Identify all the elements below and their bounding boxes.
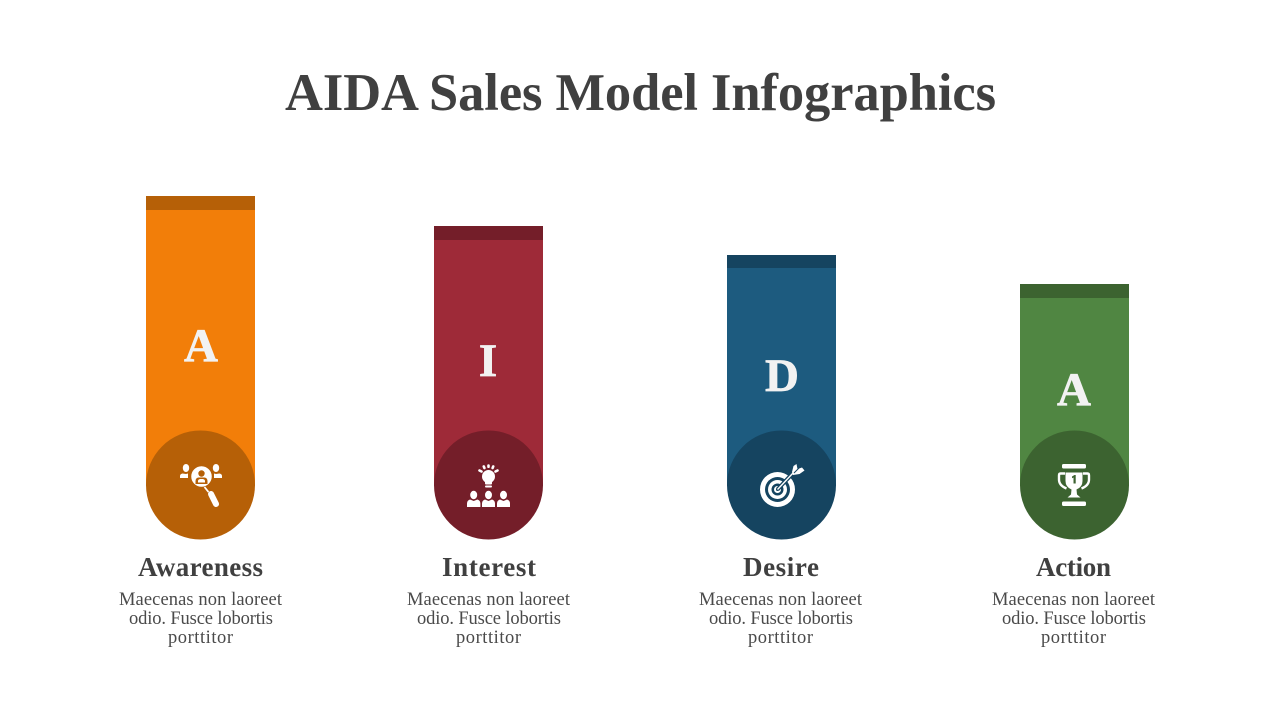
letter: I: [479, 335, 497, 387]
description: Maecenas non laoreet: [119, 590, 283, 610]
description: porttitor: [456, 628, 521, 648]
description: porttitor: [748, 628, 813, 648]
heading: Awareness: [138, 552, 263, 582]
description: odio. Fusce lobortis: [129, 609, 273, 629]
icon: people magnifier: [180, 464, 222, 504]
letter: A: [184, 320, 218, 372]
icon circle: [146, 430, 255, 540]
description: odio. Fusce lobortis: [1002, 609, 1146, 629]
description: porttitor: [1041, 628, 1106, 648]
icon: trophy: [1059, 464, 1089, 506]
icon circle: [1020, 430, 1129, 540]
heading: Desire: [743, 552, 819, 582]
heading: Interest: [442, 552, 536, 582]
panel: Awareness: [119, 196, 283, 648]
description: Maecenas non laoreet: [407, 590, 571, 610]
title: AIDA Sales Model Infographics: [285, 64, 996, 122]
bar: [146, 196, 255, 486]
panel: Interest: [407, 226, 571, 648]
description: [407, 590, 571, 648]
letter: A: [1057, 364, 1091, 416]
icon circle: [727, 430, 836, 540]
icon: people idea: [467, 466, 510, 507]
panel: Desire: [699, 255, 863, 648]
description: [699, 590, 863, 648]
letter: D: [765, 350, 799, 402]
icon circle: [434, 430, 543, 540]
heading: Action: [1036, 552, 1111, 582]
description: [119, 590, 283, 648]
description: Maecenas non laoreet: [699, 590, 863, 610]
description: odio. Fusce lobortis: [709, 609, 853, 629]
bar: [1020, 284, 1129, 486]
description: Maecenas non laoreet: [992, 590, 1156, 610]
description: [992, 590, 1156, 648]
icon: target and dart: [760, 464, 804, 507]
description: odio. Fusce lobortis: [417, 609, 561, 629]
panel: Action: [992, 284, 1156, 648]
bar: [727, 255, 836, 486]
bar: [434, 226, 543, 486]
description: porttitor: [168, 628, 233, 648]
